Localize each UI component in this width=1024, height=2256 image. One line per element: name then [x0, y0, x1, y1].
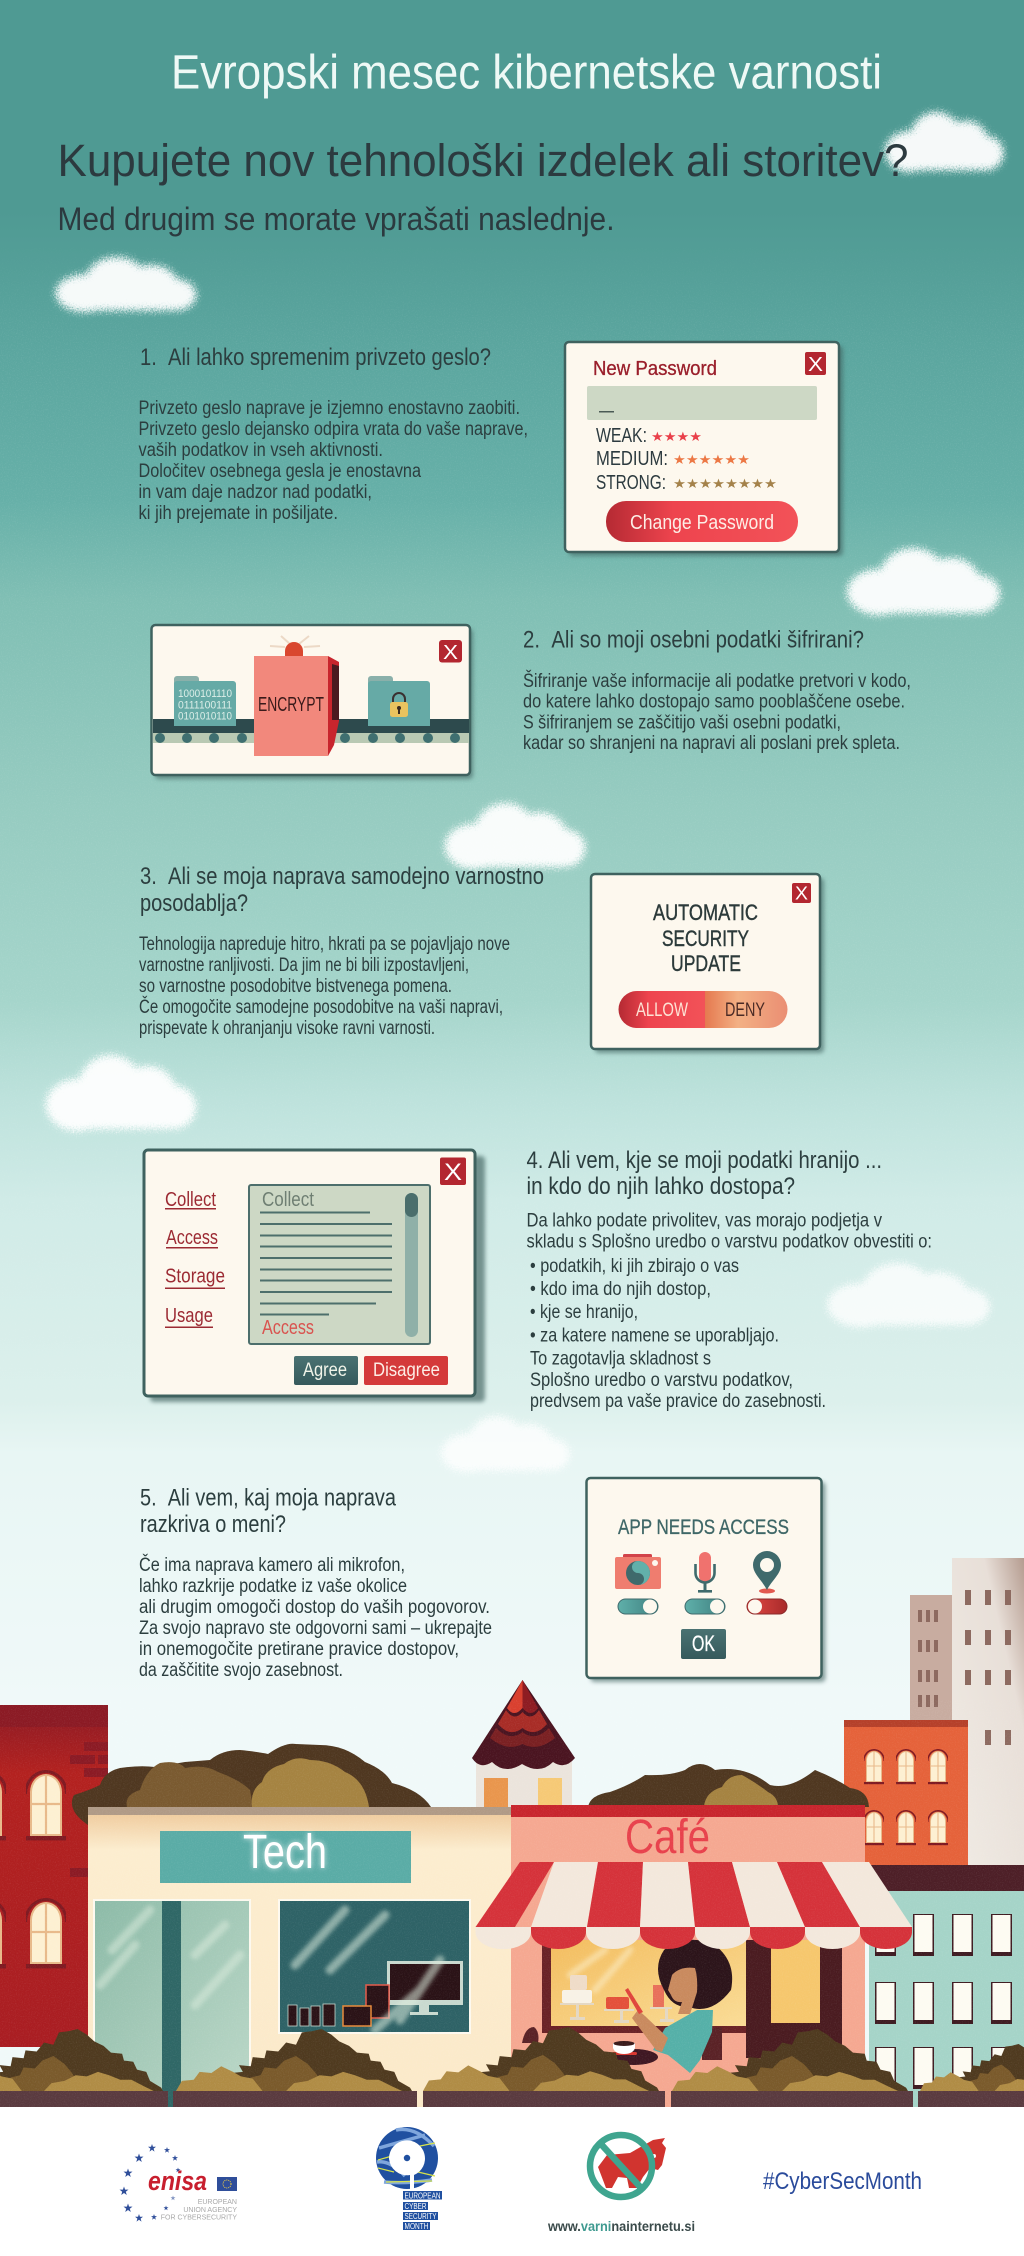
question 2 text [523, 626, 911, 754]
shop window with devices [278, 1899, 471, 2034]
question 4 text [526, 1147, 932, 1412]
cloud: lower left [46, 1055, 196, 1131]
logo: enisa: UNION AGENCY [183, 2207, 237, 2214]
panel: new password dialog: MEDIUM: [596, 448, 668, 470]
sign: tech: Tech [243, 1826, 327, 1879]
hills behind shops [72, 1744, 869, 1825]
panel: new password dialog [565, 342, 843, 556]
question 2 text: do katere lahko dostopajo samo pooblaščene osebe. [523, 692, 905, 712]
logo: varni na internetu [547, 2135, 695, 2234]
subheading: Med drugim se morate vprašati naslednje. [58, 201, 614, 237]
button: agree: Agree [303, 1359, 347, 1381]
background buildings right [910, 1558, 1024, 1868]
button: ok: OK [692, 1631, 715, 1656]
question 3 text: so varnostne posodobitve bistvenega pomena. [139, 976, 452, 997]
icon: monitor [387, 1961, 463, 2015]
icon: cakes on stands [560, 1975, 674, 2023]
question 2 text: kadar so shranjeni na napravi ali poslani prek spleta. [523, 733, 900, 754]
stars ring [120, 2144, 180, 2222]
footer background [0, 2107, 1024, 2256]
terms scroll box: Collect [262, 1189, 314, 1211]
question 4 text: predvsem pa vaše pravice do zasebnosti. [530, 1391, 826, 1412]
question 4 text: To zagotavlja skladnost s [530, 1348, 711, 1370]
question 5 text: razkriva o meni? [140, 1511, 286, 1538]
question 4 text: skladu s Splošno uredbo o varstvu podatkov obvestiti o: [526, 1232, 932, 1252]
icon: close button: X [444, 1159, 462, 1186]
sign: cafe: Café [625, 1811, 710, 1864]
question 1 text [138, 344, 528, 524]
shop door [93, 1899, 251, 2107]
logo: enisa: EUROPEAN [198, 2199, 237, 2206]
cloud: center [445, 803, 585, 869]
question 3 text: prispevate k ohranjanju visoke ravni varnosti. [139, 1018, 435, 1039]
question 4 text: Da lahko podate privolitev, vas morajo podjetja v [526, 1210, 882, 1232]
icon: close button [805, 352, 826, 376]
panel: new password dialog: ★★★★★★★★ [673, 476, 777, 491]
question 5 text: in onemogočite pretirane pravice dostopov, [139, 1639, 459, 1660]
terms scroll box: Access [262, 1317, 314, 1339]
logo: european cyber security month: SECURITY [404, 2212, 437, 2221]
question 4 text: • podatkih, ki jih zbirajo o vas [530, 1256, 739, 1277]
teal building right [869, 1865, 1024, 2107]
cafe door [746, 1940, 842, 2058]
icon: locked folder [368, 676, 430, 726]
panel: encrypt dialog [152, 625, 473, 779]
toggle: camera on [618, 1599, 658, 1614]
consent links: Usage [165, 1305, 213, 1327]
panel: automatic update dialog [591, 874, 824, 1053]
cloud: left [56, 257, 196, 312]
toggle: allow deny: DENY [725, 1000, 765, 1021]
panel: new password dialog: WEAK: [596, 425, 647, 447]
question 5 text: 5. Ali vem, kaj moja naprava [140, 1484, 397, 1512]
logo: enisa: FOR CYBERSECURITY [161, 2214, 237, 2222]
button: disagree: Disagree [373, 1359, 440, 1381]
question 5 text: ali drugim omogoči dostop do vaših pogovorov. [139, 1597, 490, 1618]
conveyor belt [153, 719, 469, 743]
question 1 text: Določitev osebnega gesla je enostavna [138, 461, 421, 482]
question 4 text: in kdo do njih lahko dostopa? [526, 1173, 795, 1200]
tech shop [88, 1807, 511, 2107]
icon: binary folder: 1000101110 [178, 688, 232, 700]
question 2 text: 2. Ali so moji osebni podatki šifrirani? [523, 626, 864, 654]
toggle: microphone on [685, 1599, 725, 1614]
question 3 text: varnostne ranljivosti. Da jim ne bi bili izpostavljeni, [139, 955, 469, 976]
question 4 text: Splošno uredbo o varstvu podatkov, [530, 1370, 793, 1391]
panel: new password dialog: STRONG: [596, 472, 666, 494]
consent links [165, 1189, 225, 1328]
question 1 text: vaših podatkov in vseh aktivnosti. [138, 440, 383, 461]
question 1 text: ki jih prejemate in pošiljate. [138, 503, 338, 524]
icon: close button [792, 883, 811, 904]
logo: enisa: enisa [148, 2166, 207, 2196]
icon: encrypt machine [254, 636, 339, 756]
consent links: Access [166, 1227, 218, 1249]
sign: tech: Tech [243, 1826, 327, 1879]
panel: consent dialog [144, 1150, 485, 1402]
icon: microphone [696, 1552, 714, 1593]
button: disagree [364, 1356, 448, 1385]
question 2 text: S šifriranjem se zaščitijo vaši osebni podatki, [523, 712, 841, 734]
icon: donkey in prohibition ring [590, 2135, 666, 2197]
question 3 text: Če omogočite samodejne posodobitve na vaši napravi, [139, 996, 503, 1018]
woman with phone and coffee [522, 1940, 732, 2073]
grain over town [0, 1700, 1024, 2107]
icon: binary folder [174, 676, 236, 726]
question 5 text: Če ima naprava kamero ali mikrofon, [139, 1554, 405, 1576]
icon: close button: X [808, 354, 823, 376]
logo: european cyber security month: EUROPEAN [404, 2192, 441, 2200]
panel: automatic update dialog: AUTOMATIC [653, 900, 758, 925]
toggle: allow deny: ALLOW [636, 1000, 688, 1021]
question 3 text: 3. Ali se moja naprava samodejno varnostno [140, 863, 544, 890]
question 1 text: Privzeto geslo naprave je izjemno enostavno zaobiti. [138, 398, 520, 419]
icon: location pin [753, 1551, 781, 1594]
icon: encrypt machine: ENCRYPT [258, 694, 324, 716]
question 3 text [139, 863, 544, 1039]
logo: varni na internetu: www.varninainternetu.si [547, 2218, 695, 2234]
question 5 text [139, 1484, 492, 1681]
cloud: top right [885, 112, 1004, 172]
panel: automatic update dialog: UPDATE [671, 951, 741, 976]
panel: app needs access dialog [586, 1478, 826, 1682]
button: change password [606, 501, 798, 542]
panel: new password dialog: ★★★★★★ [673, 452, 750, 467]
button: change password: Change Password [630, 512, 774, 534]
icon: close button [440, 1158, 466, 1186]
title: Evropski mesec kibernetske varnosti [171, 46, 882, 100]
icon: binary folder: 0101010110 [178, 710, 232, 722]
bushes and planters [0, 2027, 1024, 2107]
cafe awning [476, 1862, 912, 1949]
hashtag: #CyberSecMonth [763, 2168, 922, 2195]
icon: EU flag [217, 2177, 237, 2191]
logo: european cyber security month: CYBER [404, 2202, 427, 2211]
icon: close button: X [795, 884, 808, 904]
red building left [0, 1705, 108, 2047]
cafe shop [511, 1805, 865, 2107]
toggle: location off [747, 1599, 787, 1614]
panel: new password dialog: ★★★★ [651, 429, 702, 444]
cloud: beside question five [441, 1416, 569, 1472]
consent links: Collect [165, 1189, 216, 1211]
question 5 text: Za svojo napravo ste odgovorni sami – ukrepajte [139, 1618, 492, 1639]
question 4 text: • kje se hranijo, [530, 1302, 638, 1323]
panel: new password dialog: New Password [593, 358, 717, 380]
logo: enisa [120, 2144, 237, 2222]
icon: binary folder: 0111100111 [178, 700, 232, 712]
panel: automatic update dialog: SECURITY [662, 926, 749, 951]
question 5 text: da zaščitite svojo zasebnost. [139, 1660, 343, 1681]
icon: camera [615, 1554, 661, 1589]
question 1 text: 1. Ali lahko spremenim privzeto geslo? [140, 344, 491, 371]
panel: app needs access dialog: APP NEEDS ACCESS [618, 1516, 789, 1539]
question 3 text: posodablja? [140, 890, 248, 917]
question 1 text: Privzeto geslo dejansko odpira vrata do vaše naprave, [138, 419, 528, 440]
toggle: allow deny [618, 991, 788, 1028]
question 3 text: Tehnologija napreduje hitro, hkrati pa se pojavljajo nove [139, 934, 510, 955]
icon: coffee cup on table [610, 2041, 658, 2065]
cloud: right middle [847, 548, 1000, 615]
icon: close button: X [443, 642, 458, 664]
tower [472, 1680, 575, 1807]
question 1 text: in vam daje nadzor nad podatki, [138, 482, 372, 503]
logo: european cyber security month: MONTH [404, 2222, 429, 2231]
orange building [844, 1720, 968, 1866]
question 4 text: 4. Ali vem, kje se moji podatki hranijo ... [526, 1147, 882, 1174]
question 2 text: Šifriranje vaše informacije ali podatke pretvori v kodo, [523, 670, 911, 692]
terms scroll box [249, 1185, 430, 1344]
button: ok [681, 1629, 726, 1659]
heading: Kupujete nov tehnološki izdelek ali storitev? [58, 135, 908, 186]
consent links: Storage [165, 1266, 225, 1288]
cloud: beside question four [827, 1263, 990, 1327]
button: agree [294, 1356, 358, 1385]
logo: european cyber security month [376, 2127, 442, 2231]
icon: close button [439, 640, 462, 664]
sign: tech [160, 1826, 411, 1883]
question 4 text: • za katere namene se uporabljajo. [530, 1326, 779, 1346]
cafe window [542, 1940, 747, 2033]
question 4 text: • kdo ima do njih dostop, [530, 1279, 711, 1300]
question 5 text: lahko razkrije podatke iz vaše okolice [139, 1576, 407, 1597]
